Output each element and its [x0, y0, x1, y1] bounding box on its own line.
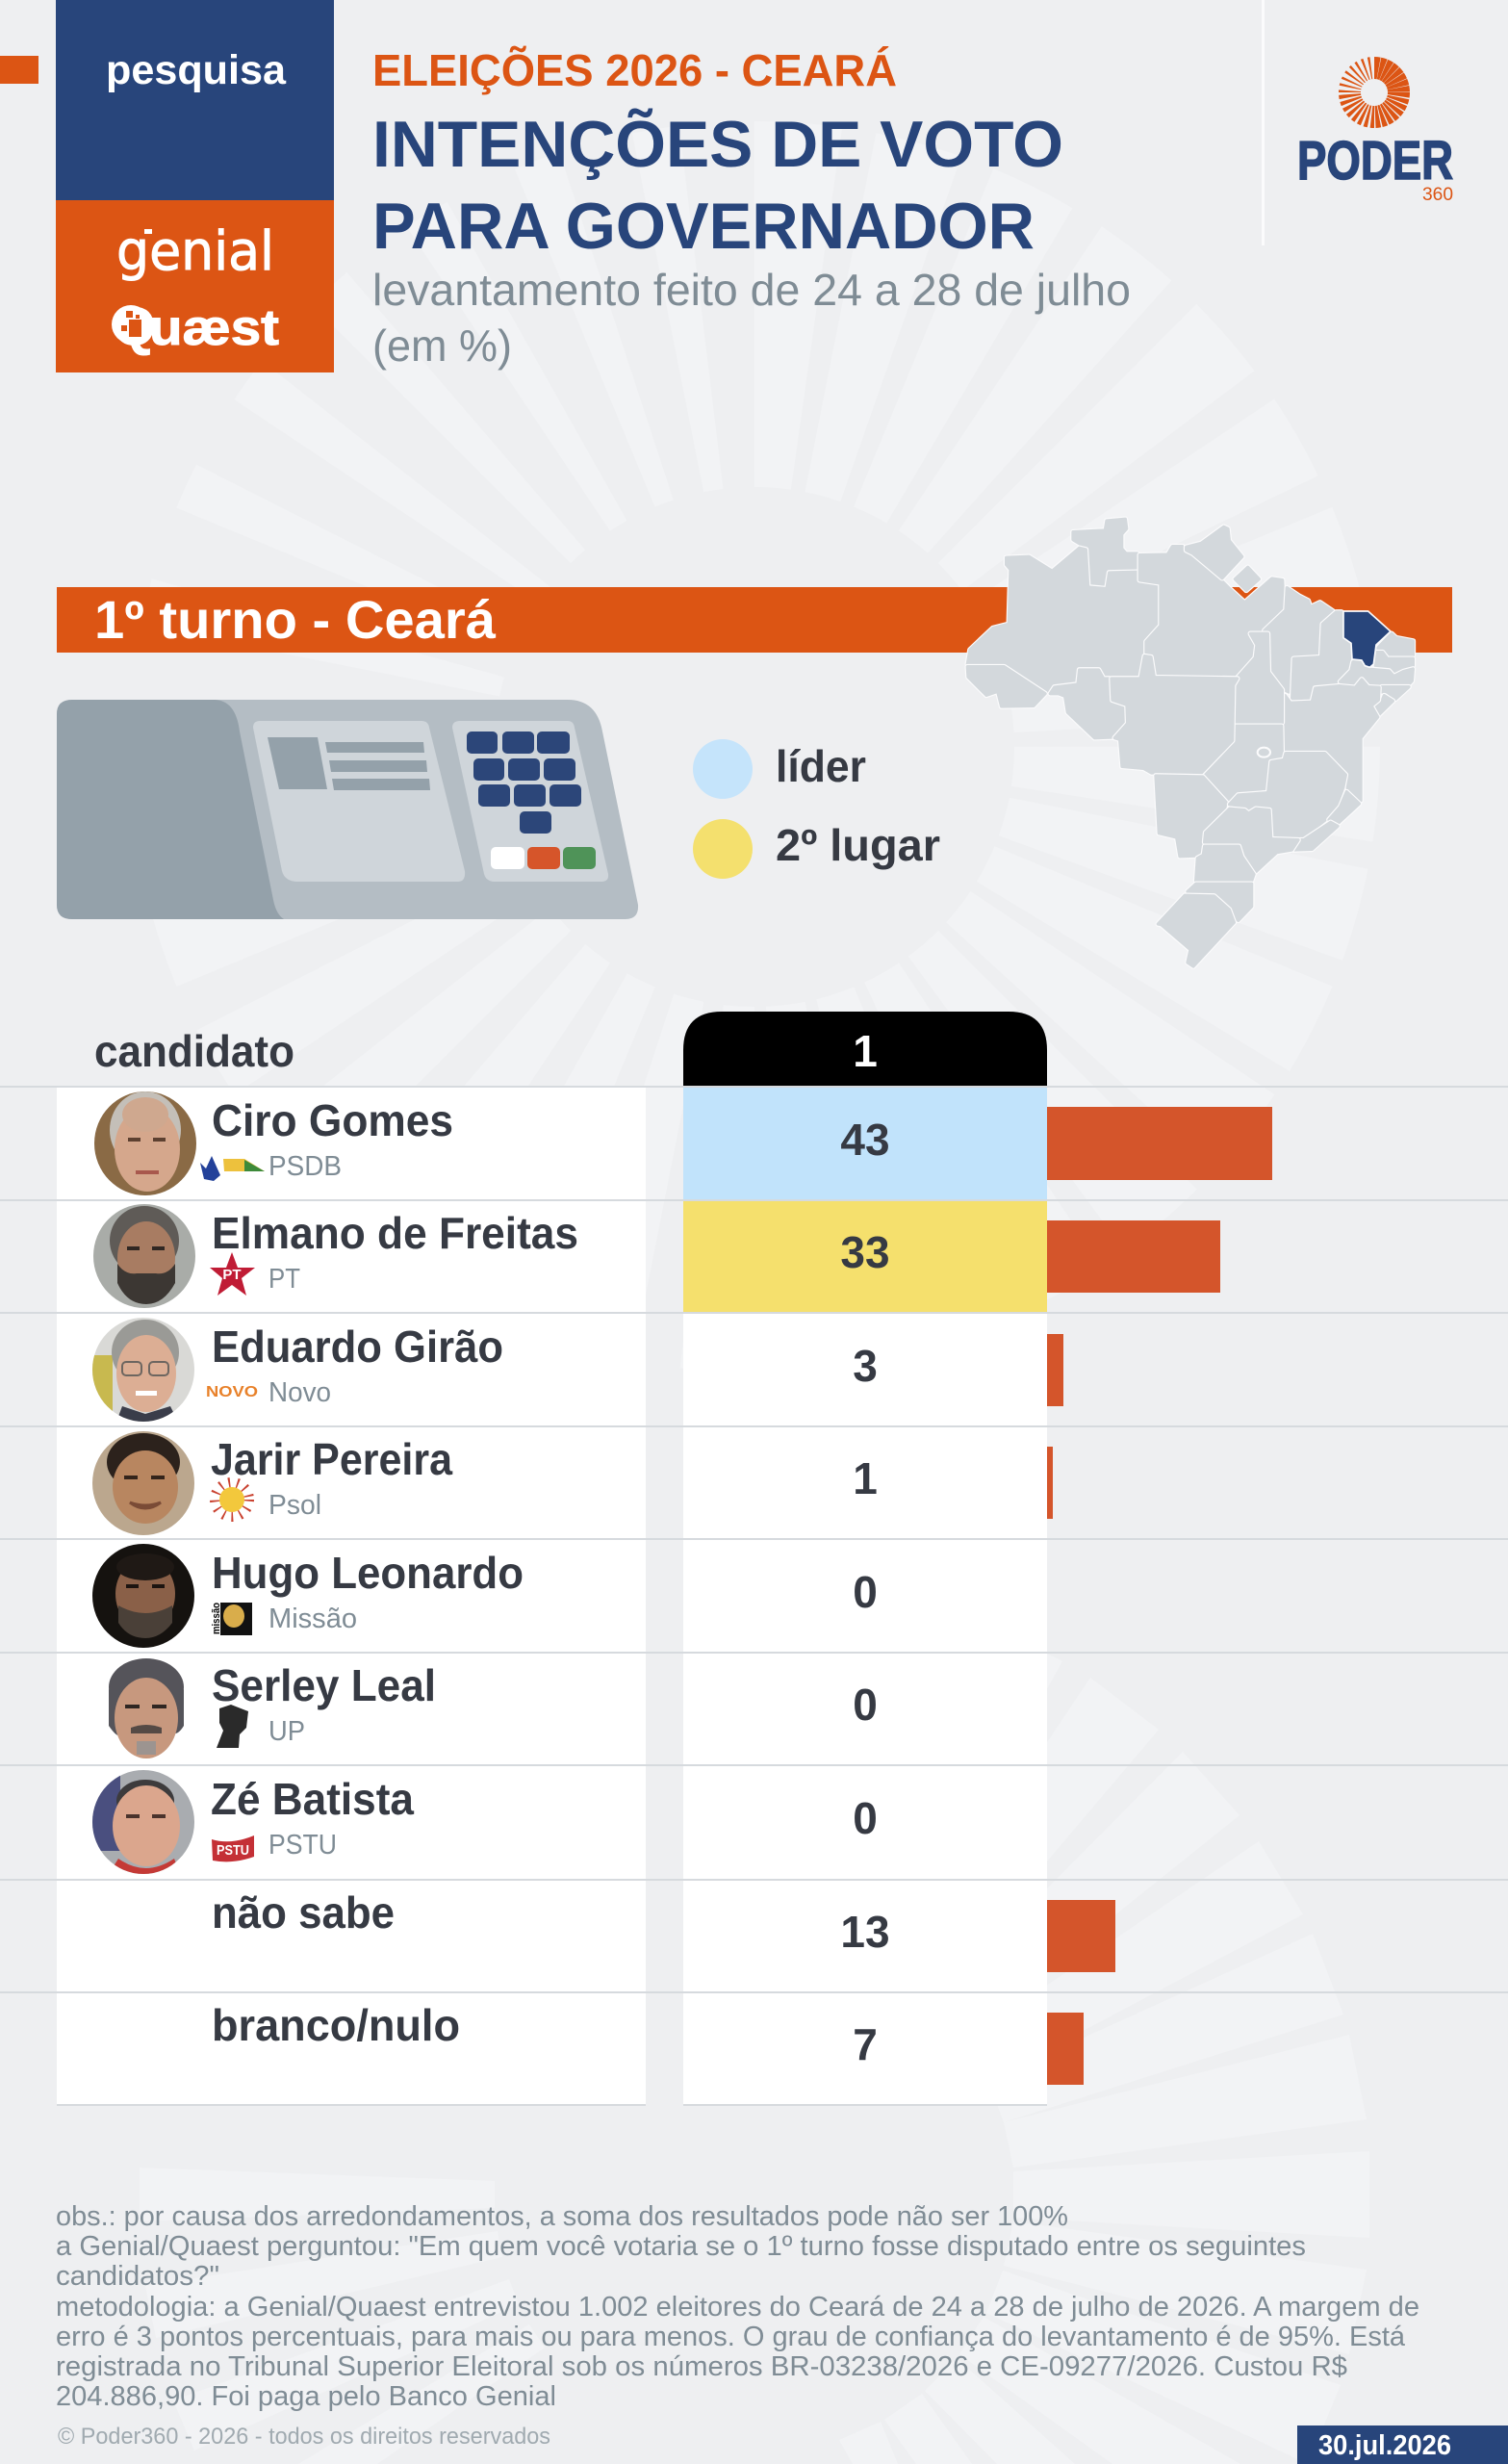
row: Elmano de Freitas	[92, 1204, 1220, 1308]
candidate name: Elmano de Freitas	[212, 1208, 578, 1258]
logo: quaest	[112, 295, 279, 356]
legend	[693, 739, 940, 879]
result: 43	[840, 1115, 890, 1165]
photo: Elmano de Freitas	[92, 1204, 196, 1308]
screen	[253, 721, 465, 882]
bar	[1047, 1900, 1115, 1972]
result: 3	[853, 1341, 878, 1391]
leader highlight	[683, 1087, 1047, 1200]
party name: Psol	[268, 1490, 321, 1521]
legend: 2º lugar	[776, 820, 940, 870]
footnotes: erro é 3 pontos percentuais, para mais ou para menos. O grau de confiança do levantamento é de 95%. Está	[56, 2322, 1406, 2352]
row: branco/nulo	[212, 2000, 1084, 2085]
panel: pesquisa sponsor	[56, 0, 334, 372]
bar	[1047, 1220, 1220, 1293]
result: 0	[853, 1680, 878, 1730]
party name: UP	[268, 1716, 305, 1747]
party name: PSDB	[268, 1151, 342, 1182]
result column header	[683, 1012, 1047, 1087]
subtitle line 2: (em %)	[372, 321, 512, 371]
icon: Missão: missão	[211, 1603, 222, 1634]
title block	[372, 45, 1131, 371]
candidate name: Serley Leal	[212, 1660, 436, 1710]
candidate name: Zé Batista	[211, 1774, 414, 1824]
row: Jarir Pereira	[91, 1431, 1053, 1535]
subtitle line 1: levantamento feito de 24 a 28 de julho	[372, 265, 1131, 315]
candidate name: Hugo Leonardo	[212, 1548, 524, 1598]
second place highlight	[683, 1200, 1047, 1313]
footnotes: registrada no Tribunal Superior Eleitoral sob os números BR-03238/2026 e CE-09277/2026. Custou R$	[56, 2351, 1347, 2382]
result: 0	[853, 1793, 878, 1843]
section banner	[57, 587, 1452, 653]
white results column	[683, 1087, 1047, 2105]
icon: PSTU flag	[212, 1835, 254, 1861]
candidate name: Ciro Gomes	[212, 1095, 453, 1145]
label: branco/nulo	[212, 2000, 460, 2050]
table	[0, 1012, 1508, 2106]
bar	[1047, 1447, 1053, 1519]
footnotes: obs.: por causa dos arredondamentos, a soma dos resultados pode não ser 100%	[56, 2201, 1068, 2232]
candidate column header: candidato	[94, 1026, 294, 1076]
party name: Missão	[268, 1604, 357, 1634]
keypad	[452, 721, 608, 882]
photo: Eduardo Girão	[91, 1318, 195, 1422]
result: 13	[840, 1907, 890, 1957]
heading line 1: INTENÇÕES DE VOTO	[372, 107, 1063, 181]
logo: genial: genial	[116, 220, 274, 283]
heading line 2: PARA GOVERNADOR	[372, 190, 1035, 263]
icon: PT star	[210, 1252, 255, 1296]
result column header: 1	[853, 1026, 878, 1076]
kicker: ELEIÇÕES 2026 - CEARÁ	[372, 45, 897, 95]
result: 7	[853, 2019, 878, 2069]
photo: Hugo Leonardo	[91, 1544, 195, 1648]
icon: sun	[1349, 67, 1399, 117]
icon: UP fist	[217, 1705, 248, 1748]
logo: quaest: uæst	[149, 300, 279, 356]
photo: Ciro Gomes	[93, 1091, 197, 1195]
icon: PT star: PT	[222, 1267, 242, 1283]
candidate name: Jarir Pereira	[211, 1434, 452, 1484]
Ceará state	[1343, 611, 1391, 667]
icon: Missão	[211, 1603, 252, 1635]
row: Ciro Gomes	[93, 1091, 1272, 1195]
orange tick marker	[0, 56, 38, 84]
party name: PSTU	[268, 1830, 337, 1861]
footnotes: 204.886,90. Foi paga pelo Banco Genial	[56, 2381, 556, 2412]
360: 360	[1422, 185, 1453, 205]
copyright: © Poder360 - 2026 - todos os direitos reservados	[58, 2424, 550, 2450]
legend: líder	[776, 741, 866, 791]
party name: Novo	[268, 1377, 331, 1408]
icon: PSTU flag: PSTU	[217, 1842, 249, 1859]
row: não sabe	[212, 1887, 1115, 1972]
result: 33	[840, 1227, 890, 1277]
footnotes	[56, 2201, 1419, 2412]
date badge: 30.jul.2026	[1318, 2430, 1451, 2461]
pesquisa label: pesquisa	[106, 47, 287, 93]
footnotes: candidatos?"	[56, 2261, 219, 2292]
result: 1	[853, 1453, 878, 1503]
logo: Poder360	[1297, 67, 1453, 205]
row: Eduardo Girão	[91, 1318, 1063, 1422]
legend: líder	[693, 739, 753, 799]
legend: 2º lugar	[693, 819, 753, 879]
icon: PSDB toucan	[200, 1156, 265, 1181]
logo: quaest: Q	[114, 295, 156, 356]
date badge	[1297, 2426, 1508, 2464]
photo: Jarir Pereira	[91, 1431, 195, 1535]
icon: Novo: NOVO	[206, 1384, 258, 1400]
icon: voting machine	[57, 700, 638, 919]
result: 0	[853, 1567, 878, 1617]
wordmark: PODER	[1297, 130, 1453, 192]
footnotes: metodologia: a Genial/Quaest entrevistou 1.002 eleitores do Ceará de 24 a 28 de julho de 2026. A margem de	[56, 2292, 1419, 2323]
photo: Serley Leal	[109, 1658, 184, 1758]
map of Brazil with Ceará highlighted	[967, 519, 1413, 966]
footnotes: a Genial/Quaest perguntou: "Em quem você votaria se o 1º turno fosse disputado entre os seguintes	[56, 2231, 1306, 2262]
icon: Psol sun	[217, 1485, 246, 1514]
photo: Zé Batista	[91, 1770, 195, 1874]
banner heading: 1º turno - Ceará	[94, 589, 497, 650]
bar	[1047, 1107, 1272, 1180]
bar	[1047, 1334, 1063, 1406]
label: não sabe	[212, 1887, 395, 1938]
party name: PT	[268, 1264, 300, 1295]
white candidate column	[57, 1087, 646, 2105]
bar	[1047, 2013, 1084, 2085]
row: Hugo Leonardo	[91, 1544, 878, 1648]
row: Zé Batista	[91, 1770, 878, 1874]
row: Serley Leal	[109, 1658, 878, 1758]
candidate name: Eduardo Girão	[212, 1322, 503, 1372]
